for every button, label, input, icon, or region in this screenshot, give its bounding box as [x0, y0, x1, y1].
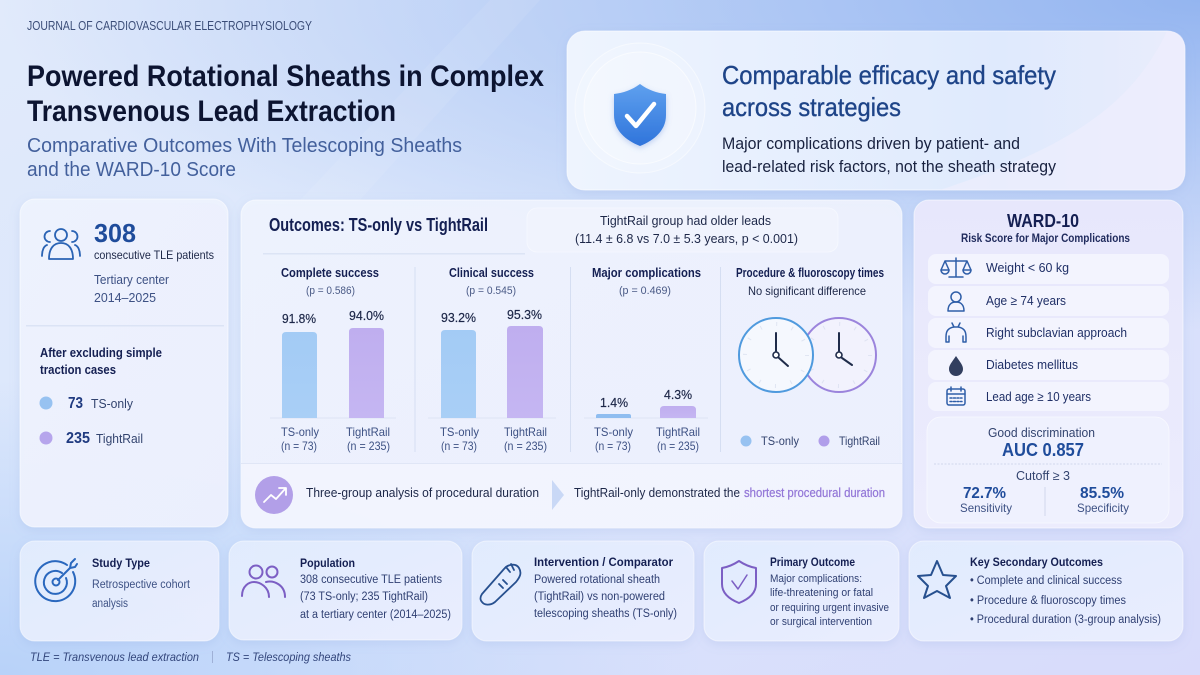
card: primary outcome: [704, 541, 899, 641]
callout heading: Comparable efficacy and safety: [722, 60, 1056, 90]
bar chart: complete success: TS-only: [281, 425, 319, 439]
bar chart: clinical success: 95.3%: [507, 307, 542, 322]
group: TS-only count: 73: [68, 395, 83, 412]
bar chart: major complications: [584, 266, 708, 453]
title: Transvenous Lead Extraction: [27, 95, 396, 128]
card: key secondary outcomes: [909, 541, 1183, 641]
bar chart: clinical success: Clinical success: [449, 266, 534, 280]
note: lead age: (11.4 ± 6.8 vs 7.0 ± 5.3 years, p < 0.001): [575, 231, 798, 246]
risk factor: diabetes: Diabetes mellitus: [986, 357, 1078, 372]
performance card: Specificity: [1077, 501, 1129, 515]
bar chart: major complications: Major complications: [592, 266, 701, 280]
bar chart: major complications: (p = 0.469): [619, 285, 671, 297]
exclusion heading: After excluding simple: [40, 346, 162, 360]
panel: key finding callout: [567, 31, 1185, 190]
secondary outcomes list: [970, 575, 1161, 626]
subtitle: [27, 135, 462, 181]
group: TS-only count: [40, 395, 134, 412]
icon: shield check: [722, 561, 756, 603]
primary outcome text: or surgical intervention: [770, 616, 872, 628]
group: TightRail count: TightRail: [96, 432, 143, 446]
primary outcome text: life-threatening or fatal: [770, 587, 873, 599]
card: population: [229, 541, 462, 640]
card: key secondary outcomes: Key Secondary Outcomes: [970, 555, 1103, 569]
risk factor: subclavian: [928, 318, 1169, 348]
note: lead age: TightRail group had older leads: [600, 213, 771, 228]
card: primary outcome: Primary Outcome: [770, 555, 855, 569]
card: study type: Study Type: [92, 556, 150, 570]
bar chart: major complications: TS-only: [594, 425, 633, 439]
panel: WARD-10: [914, 200, 1183, 528]
subtitle: Comparative Outcomes With Telescoping Sheaths: [27, 135, 462, 157]
stat: 308 patients: [94, 218, 214, 262]
WARD-10 heading: WARD-10: [1007, 211, 1079, 231]
footnote: abbreviations: TLE = Transvenous lead extraction: [30, 650, 199, 664]
performance card: Cutoff ≥ 3: [1016, 468, 1070, 483]
callout heading: across strategies: [722, 92, 901, 122]
procedure and fluoroscopy times: Procedure & fluoroscopy times: [736, 266, 884, 280]
exclusion heading: traction cases: [40, 363, 116, 377]
bar chart: major complications: 1.4%: [600, 395, 628, 410]
bar chart: clinical success: (n = 235): [504, 439, 547, 453]
study type text: [92, 579, 191, 610]
population text: (73 TS-only; 235 TightRail): [300, 591, 428, 603]
risk factor: lead age: [928, 382, 1169, 411]
risk factor: weight: Weight < 60 kg: [986, 260, 1069, 275]
risk factor: subclavian: Right subclavian approach: [986, 325, 1127, 340]
legend: TS-only: [761, 434, 799, 448]
intervention text: [534, 574, 677, 620]
performance card: AUC 0.857: [1002, 440, 1084, 460]
title: [27, 60, 544, 128]
bar chart: complete success: [270, 266, 396, 453]
risk factor: weight: [928, 254, 1169, 284]
performance card: 72.7%: [963, 485, 1006, 502]
callout text: [722, 134, 1056, 176]
note: lead age: [527, 208, 838, 252]
performance card: [927, 417, 1169, 523]
population text: 308 consecutive TLE patients: [300, 574, 442, 586]
panel: outcomes: [241, 200, 902, 528]
bar chart: complete success: 91.8%: [282, 311, 316, 326]
icon: patients group: [42, 229, 80, 259]
intervention text: (TightRail) vs non-powered: [534, 591, 665, 603]
primary outcome text: [770, 573, 889, 628]
group: TightRail count: 235: [66, 430, 90, 447]
three-group analysis strip: TightRail-only demonstrated the: [574, 485, 740, 500]
callout text: lead-related risk factors, not the sheath strategy: [722, 157, 1056, 176]
risk factor: diabetes: [928, 350, 1169, 380]
procedure and fluoroscopy times: [736, 266, 884, 448]
bar chart: clinical success: (p = 0.545): [466, 285, 516, 297]
secondary outcomes list: • Complete and clinical success: [970, 575, 1122, 587]
population text: [300, 574, 451, 621]
icon: shield with check: [575, 43, 705, 173]
performance card: Good discrimination: [988, 425, 1095, 440]
subtitle: and the WARD-10 Score: [27, 159, 236, 181]
legend: TightRail: [839, 434, 880, 448]
title: Powered Rotational Sheaths in Complex: [27, 60, 544, 93]
bar chart: complete success: (n = 235): [347, 439, 390, 453]
setting and period: [94, 273, 169, 305]
procedure and fluoroscopy times: No significant difference: [748, 284, 866, 298]
bar chart: major complications: (n = 73): [595, 439, 631, 453]
bar chart: complete success: TightRail: [346, 425, 390, 439]
primary outcome text: Major complications:: [770, 573, 862, 585]
bar chart: major complications: (n = 235): [657, 439, 699, 453]
intervention text: Powered rotational sheath: [534, 574, 660, 586]
journal label: JOURNAL OF CARDIOVASCULAR ELECTROPHYSIOLOGY: [27, 19, 313, 33]
footnote: abbreviations: [30, 650, 351, 664]
stat: 308 patients: consecutive TLE patients: [94, 248, 214, 262]
bar chart: complete success: 94.0%: [349, 308, 384, 323]
legend: [740, 434, 880, 448]
card: intervention / comparator: [472, 541, 694, 641]
callout heading: [722, 60, 1056, 122]
icon: sheath: [480, 564, 520, 605]
risk factor: age: [928, 286, 1169, 316]
bar chart: clinical success: [428, 266, 556, 453]
group: TS-only count: TS-only: [91, 397, 134, 411]
performance card: Sensitivity: [960, 501, 1012, 515]
icon: overlapping clocks: [739, 318, 876, 392]
card: population: Population: [300, 556, 355, 570]
card: intervention / comparator: Intervention / Comparator: [534, 555, 673, 569]
bar chart: major complications: 4.3%: [664, 387, 692, 402]
bar chart: clinical success: (n = 73): [441, 439, 477, 453]
bar chart: clinical success: TightRail: [504, 425, 547, 439]
stat: 308 patients: 308: [94, 218, 136, 248]
bar chart: major complications: TightRail: [656, 425, 700, 439]
secondary outcomes list: • Procedure & fluoroscopy times: [970, 595, 1126, 607]
footnote: abbreviations: TS = Telescoping sheaths: [226, 650, 351, 664]
bar chart: complete success: Complete success: [281, 266, 379, 280]
performance card: 85.5%: [1080, 485, 1124, 502]
group: TightRail count: [40, 430, 143, 447]
risk factor: age: Age ≥ 74 years: [986, 293, 1066, 308]
population text: at a tertiary center (2014–2025): [300, 609, 451, 621]
setting and period: Tertiary center: [94, 273, 169, 287]
study type text: analysis: [92, 598, 128, 610]
icon: target: [35, 559, 77, 601]
WARD-10 heading: Risk Score for Major Complications: [961, 233, 1130, 245]
WARD-10 heading: [961, 211, 1130, 245]
bar chart: complete success: (n = 73): [281, 439, 317, 453]
study type text: Retrospective cohort: [92, 579, 191, 591]
exclusion heading: [40, 346, 162, 377]
arrow: [552, 480, 564, 510]
risk factor: lead age: Lead age ≥ 10 years: [986, 389, 1091, 404]
secondary outcomes list: • Procedural duration (3-group analysis): [970, 614, 1161, 626]
three-group analysis strip: shortest procedural duration: [744, 485, 885, 500]
panel: cohort: [20, 199, 228, 527]
bar chart: complete success: (p = 0.586): [306, 285, 355, 297]
bar chart: clinical success: 93.2%: [441, 310, 476, 325]
icon: star: [918, 561, 956, 598]
callout text: Major complications driven by patient- and: [722, 134, 1020, 153]
three-group analysis strip: [241, 463, 902, 528]
three-group analysis strip: Three-group analysis of procedural duration: [306, 485, 539, 500]
card: study type: [20, 541, 219, 641]
primary outcome text: or requiring urgent invasive: [770, 602, 889, 614]
icon: trend arrow: [255, 476, 293, 514]
panel heading: Outcomes: TS-only vs TightRail: [269, 215, 488, 235]
intervention text: telescoping sheaths (TS-only): [534, 608, 677, 620]
bar chart: clinical success: TS-only: [440, 425, 479, 439]
setting and period: 2014–2025: [94, 291, 156, 305]
icon: people: [242, 566, 285, 597]
